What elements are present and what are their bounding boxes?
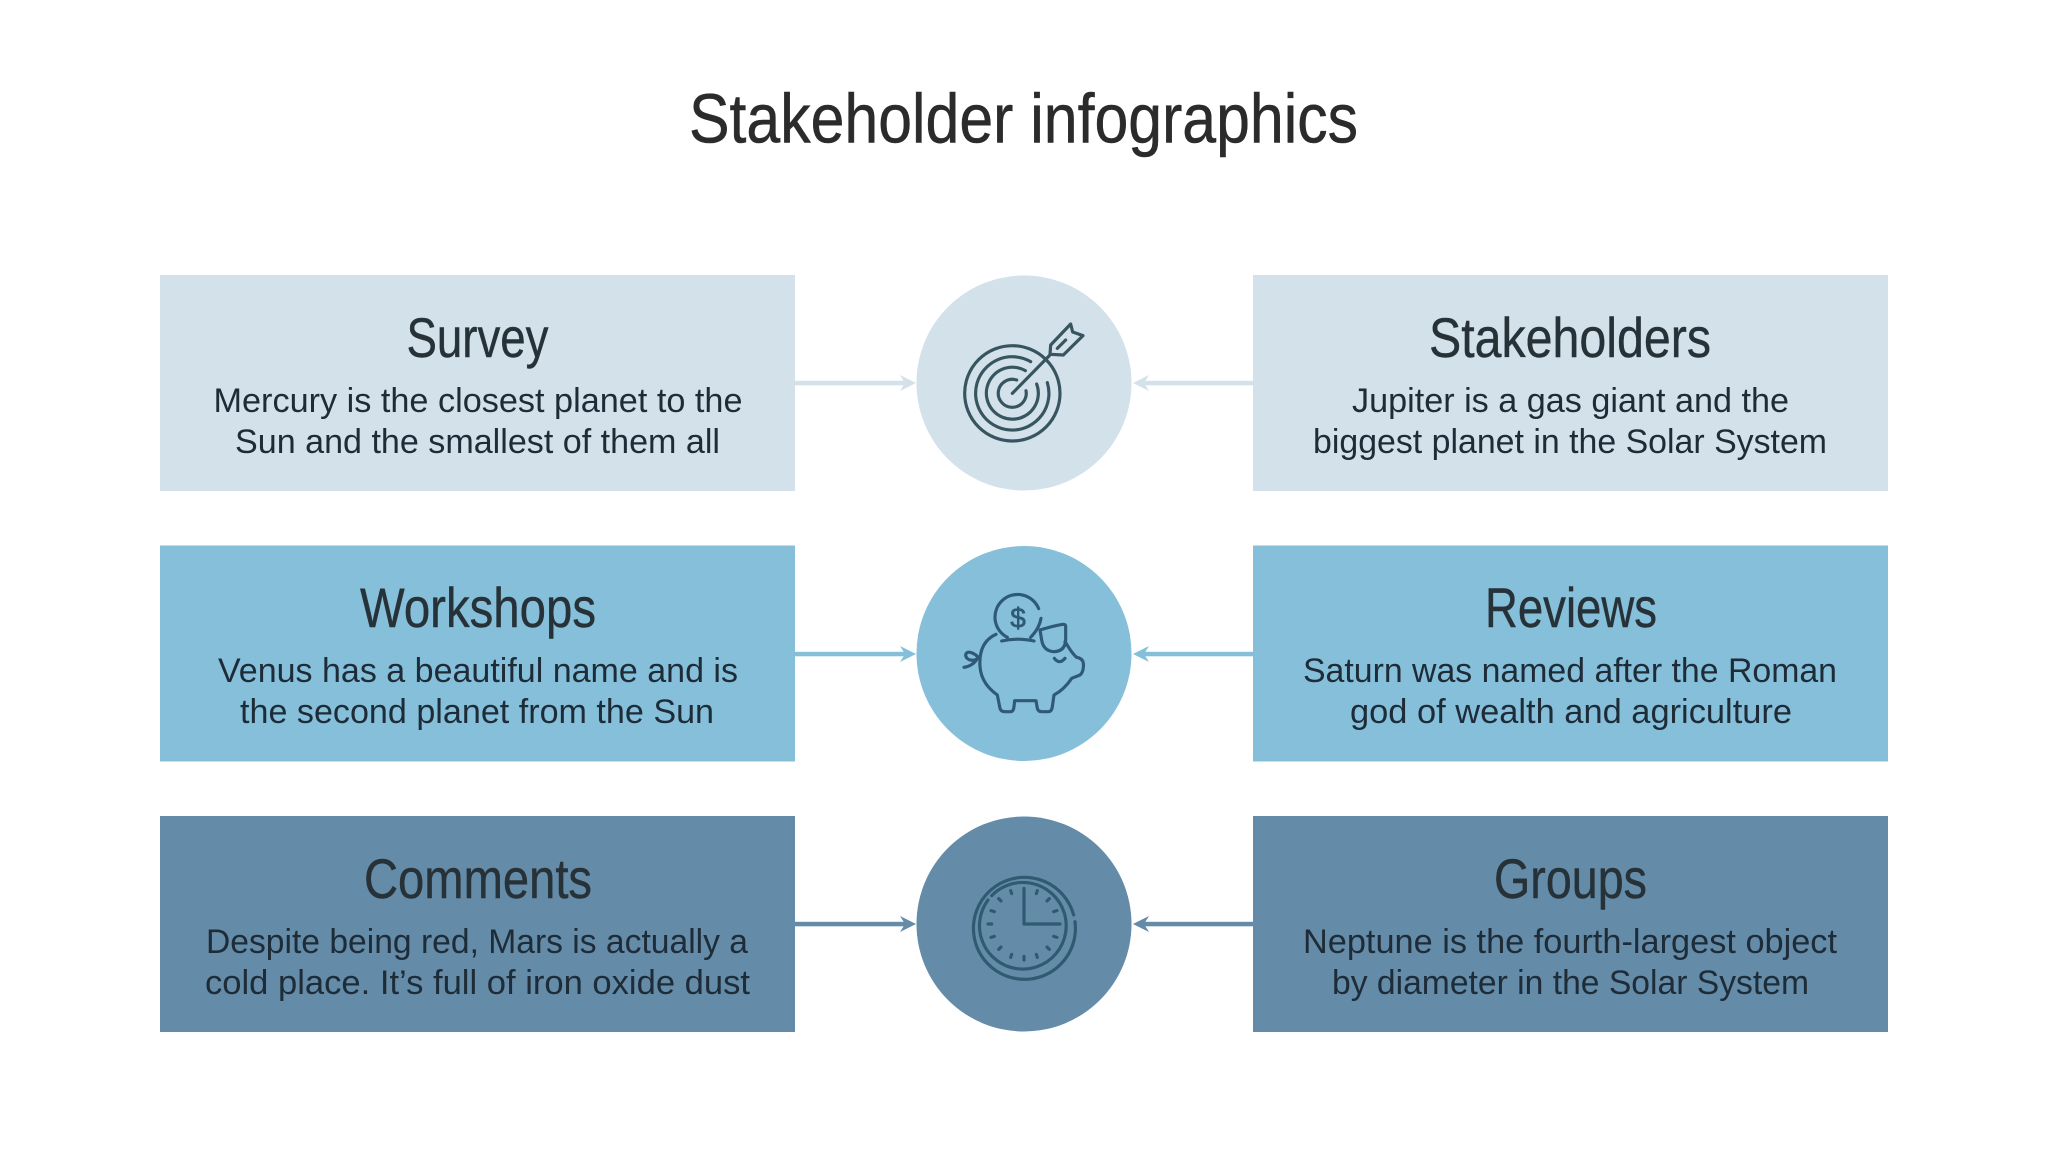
panel: Survey: [160, 275, 795, 491]
arrow: Reviews to piggy bank: [1133, 646, 1253, 662]
icon: clock: [973, 877, 1075, 979]
icon: piggy bank with coin: [964, 594, 1083, 712]
arrow: Stakeholders to target: [1133, 375, 1253, 391]
panel: Reviews: Saturn was named after the Roman: [1303, 652, 1837, 690]
icon: target with arrow: [965, 324, 1083, 441]
arrow: Workshops to piggy bank: [795, 646, 916, 662]
panel: Reviews: god of wealth and agriculture: [1350, 693, 1792, 731]
panel: Reviews: [1253, 546, 1888, 762]
panel: Workshops: Workshops: [360, 576, 596, 639]
panel: Groups: [1253, 816, 1888, 1032]
arrow: Survey to target: [795, 375, 916, 391]
panel: Groups: Neptune is the fourth-largest object: [1303, 923, 1838, 961]
panel: Comments: Comments: [364, 847, 592, 910]
panel: Stakeholders: [1253, 275, 1888, 491]
icon circle: target: [916, 276, 1132, 490]
panel: Comments: [160, 816, 795, 1032]
arrow: Comments to clock: [795, 916, 916, 932]
panel: Survey: Mercury is the closest planet to the: [214, 382, 742, 420]
panel: Comments: Despite being red, Mars is actually a: [206, 923, 748, 961]
panel: Groups: by diameter in the Solar System: [1332, 964, 1809, 1002]
panel: Survey: Sun and the smallest of them all: [235, 423, 720, 461]
panel: Stakeholders: Jupiter is a gas giant and the: [1352, 382, 1789, 420]
title: Stakeholder infographics: [689, 80, 1358, 158]
icon circle: clock: [916, 816, 1132, 1032]
arrow: Groups to clock: [1133, 916, 1253, 932]
icon circle: piggy bank: [916, 546, 1132, 761]
panel: Stakeholders: Stakeholders: [1429, 306, 1711, 369]
panel: Groups: Groups: [1494, 847, 1647, 910]
panel: Workshops: Venus has a beautiful name and is: [218, 652, 738, 690]
panel: Survey: Survey: [406, 306, 548, 369]
panel: Workshops: the second planet from the Sun: [240, 693, 714, 731]
panel: Workshops: [160, 546, 795, 762]
icon: piggy bank with coin: $: [1010, 603, 1026, 634]
panel: Stakeholders: biggest planet in the Solar System: [1313, 423, 1827, 461]
panel: Reviews: Reviews: [1485, 576, 1657, 639]
panel: Comments: cold place. It’s full of iron oxide dust: [205, 964, 751, 1002]
